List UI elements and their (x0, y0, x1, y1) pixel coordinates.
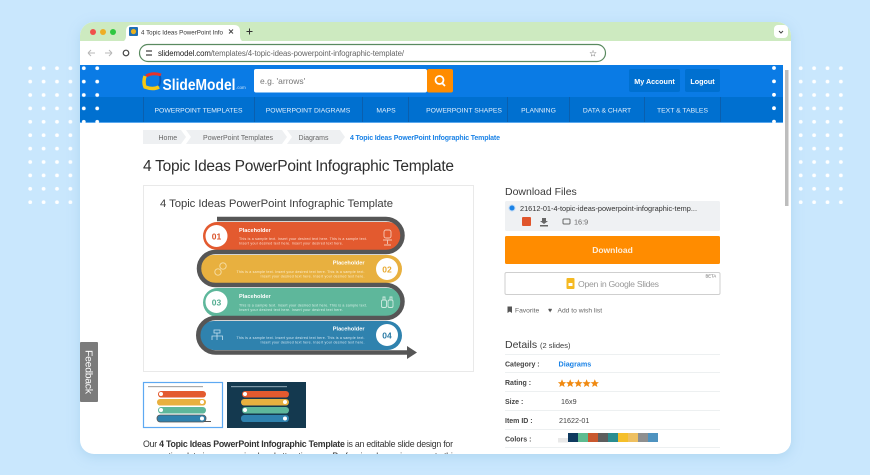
browser address toolbar: ☆ (589, 48, 597, 58)
item id row: Item ID : (505, 418, 533, 425)
size row (505, 397, 577, 406)
details panel (505, 339, 720, 448)
thumbnail: dark slide (227, 382, 306, 428)
bar 3: green (203, 288, 402, 317)
account button (629, 69, 680, 92)
page title: 4 Topic Ideas PowerPoint Infographic Template (143, 158, 454, 175)
category row (505, 361, 591, 368)
google slides button: Open in Google Slides (578, 279, 660, 289)
item id row: 21622-01 (559, 416, 589, 425)
thumbnail: light slide (144, 382, 222, 428)
wish list link (548, 308, 602, 312)
navigation bar: TEXT & TABLES (657, 108, 708, 114)
icon: chair (383, 230, 392, 245)
colors row (505, 433, 658, 444)
browser address toolbar (80, 41, 791, 62)
colors row: Colors : (505, 436, 531, 444)
file card: 21612-01-4-topic-ideas-powerpoint-infographic-temp... (520, 204, 697, 213)
icon: org chart (212, 330, 222, 340)
navigation bar: POWERPOINT SHAPES (426, 108, 502, 114)
google slides button: BETA (706, 274, 716, 278)
category row: Category : (505, 362, 540, 368)
browser tab bar: 4 Topic Ideas PowerPoint Info (141, 30, 223, 36)
breadcrumb: PowerPoint Templates (203, 135, 274, 142)
search box: e.g. 'arrows' (260, 76, 306, 86)
browser address toolbar: slidemodel.com/templates/4-topic-ideas-powerpoint-infographic-template/ (158, 49, 405, 58)
description text: Our 4 Topic Ideas PowerPoint Infographic Template is an editable slide design for (143, 439, 453, 449)
bar 2: yellow: 02 (382, 264, 392, 274)
navigation bar: MAPS (376, 108, 396, 114)
description text (143, 440, 453, 454)
dots overlapping window (82, 66, 100, 123)
feedback tab (80, 342, 98, 402)
scrollbar (783, 65, 791, 454)
navigation bar: DATA & CHART (583, 108, 631, 114)
bar 2: yellow: Placeholder (333, 260, 365, 266)
dots overlapping window right (772, 66, 776, 124)
bar 1: orange: 01 (212, 232, 221, 242)
site logo: .com (236, 85, 246, 90)
rating row (505, 379, 599, 387)
bar 1: orange: This is a sample text. Insert your desired text here. This is a sample text. (239, 237, 367, 241)
download button (505, 236, 720, 264)
slide title: 4 Topic Ideas PowerPoint Infographic Template (160, 198, 393, 210)
details heading: Details (2 slides) (505, 339, 571, 351)
wish list link: Add to wish list (558, 308, 602, 314)
bar 1: orange: Insert your desired text here. Insert your desired text here. (239, 242, 343, 246)
breadcrumb: Home (158, 135, 177, 142)
bar 1: orange (203, 222, 402, 250)
bar 2: yellow: This is a sample text. Insert your desired text here. This is a sample text. (236, 270, 364, 274)
navigation bar: POWERPOINT TEMPLATES (154, 108, 243, 114)
bar 3: green: Placeholder (239, 294, 272, 300)
logout button (685, 69, 720, 92)
google slides button (505, 272, 720, 294)
size row: 16x9 (561, 397, 577, 406)
bar 4: blue: This is a sample text. Insert your desired text here. This is a sample text. (236, 336, 364, 340)
breadcrumb (143, 130, 500, 144)
favorite link (508, 306, 539, 313)
feedback tab: Feedback (82, 350, 94, 395)
bar 4: blue: Placeholder (333, 326, 365, 332)
bar 3: green: Insert your desired text here. Insert your desired text here. (239, 308, 343, 312)
site logo: SlideModel (162, 77, 236, 94)
size row: Size : (505, 399, 523, 406)
browser window (77, 22, 791, 461)
bar 2: yellow: Insert your desired text here. Insert your desired text here. (260, 274, 364, 278)
navigation bar (80, 97, 783, 123)
bar 1: orange: Placeholder (239, 228, 272, 234)
file card (505, 201, 720, 231)
dot pattern: right (794, 62, 848, 204)
slide preview panel (144, 186, 474, 372)
bar 4: blue (199, 321, 402, 350)
browser tab bar (80, 22, 791, 42)
navigation bar: POWERPOINT DIAGRAMS (266, 108, 351, 114)
download button: Download (592, 245, 633, 255)
navigation bar: PLANNING (521, 108, 556, 114)
file card: 16:9 (574, 218, 588, 226)
bar 2: yellow (199, 255, 402, 283)
icon: binoculars (382, 297, 393, 308)
site header (80, 65, 783, 97)
account button: My Account (634, 77, 675, 86)
category row: Diagrams (558, 360, 591, 368)
wish list link: ♥ (548, 308, 552, 314)
dot pattern: left (24, 62, 78, 204)
bar 3: green: 03 (212, 298, 221, 308)
rating row: Rating : (505, 380, 531, 387)
bar 4: blue: Insert your desired text here. Insert your desired text here. (260, 340, 364, 344)
logout button: Logout (690, 77, 715, 86)
description text: presenting data in an organized and attractive way. Professionals can incorporate this (143, 451, 458, 461)
download files panel (505, 186, 720, 314)
item id row (505, 416, 589, 425)
breadcrumb: 4 Topic Ideas PowerPoint Infographic Template (350, 135, 500, 142)
icon: gears (215, 263, 226, 275)
winding arrow (198, 219, 417, 359)
favorite link: Favorite (515, 308, 539, 314)
search box (254, 69, 453, 92)
bar 4: blue: 04 (382, 330, 392, 340)
bar 3: green: This is a sample text. Insert your desired text here. This is a sample text. (239, 304, 367, 308)
site logo (144, 74, 246, 94)
download heading: Download Files (505, 186, 577, 198)
breadcrumb: Diagrams (298, 135, 329, 142)
